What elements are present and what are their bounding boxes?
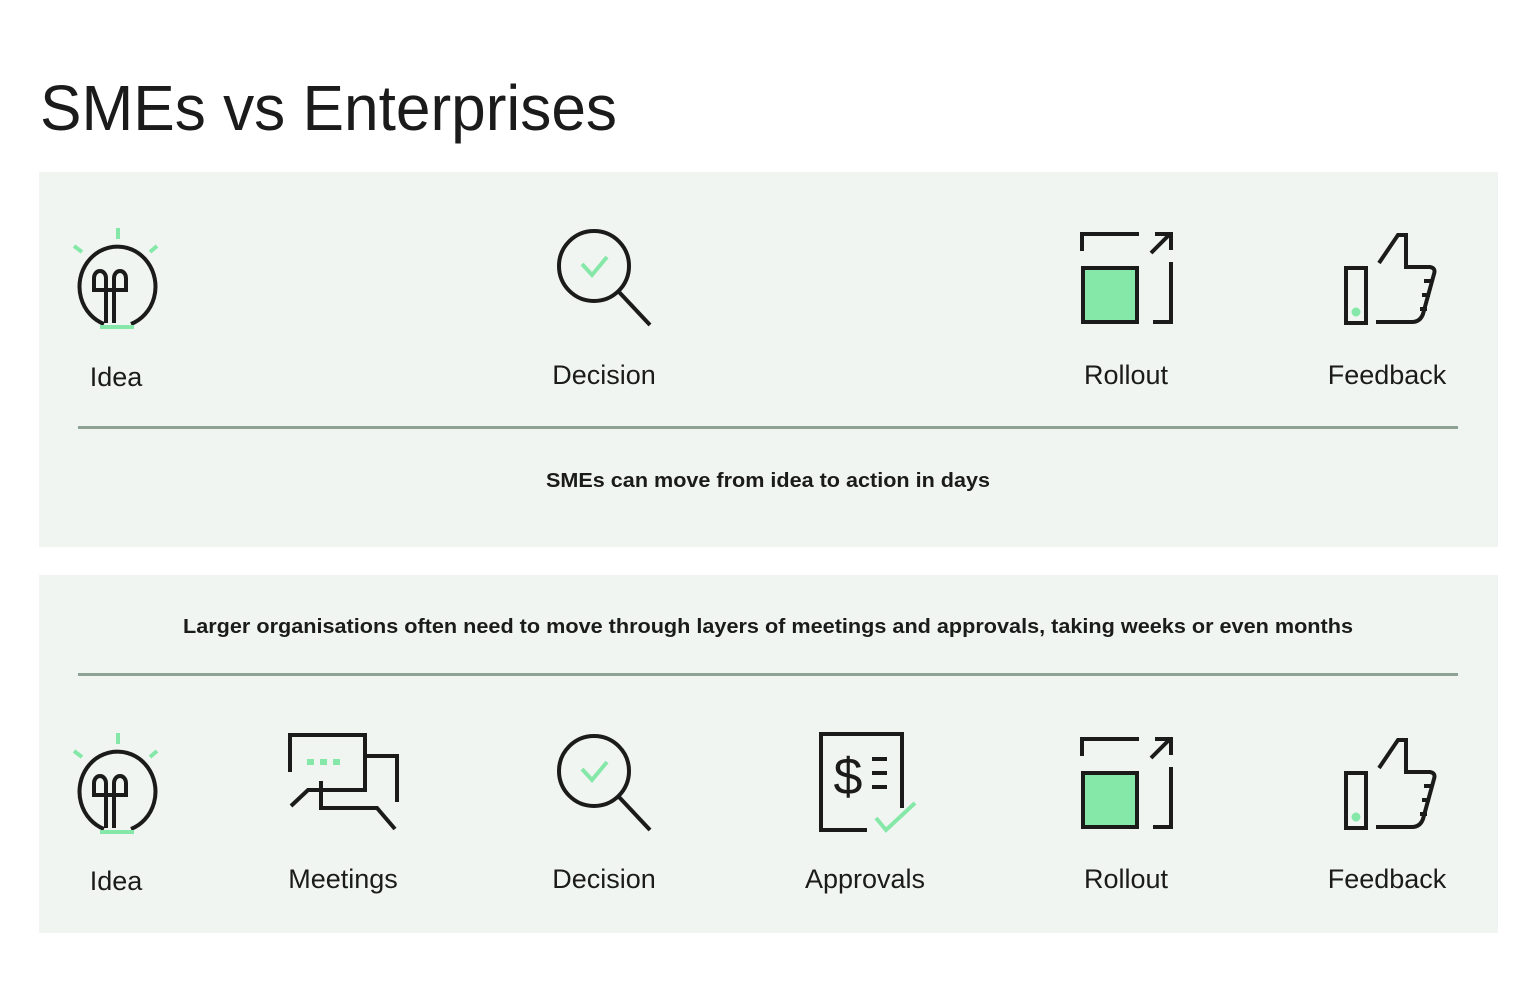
icon: decision [559, 736, 650, 830]
label: meetings: Meetings [288, 864, 398, 894]
icon: approvals: $ [834, 748, 863, 806]
label: idea: Idea [90, 866, 143, 896]
panel: SMEs [39, 172, 1498, 547]
label: approvals: Approvals [805, 864, 925, 894]
label: rollout: Rollout [1084, 360, 1169, 390]
icon: rollout [1082, 739, 1171, 827]
title: SMEs vs Enterprises [40, 72, 617, 144]
label: feedback: Feedback [1328, 360, 1447, 390]
icon: meetings [290, 735, 397, 829]
label: idea: Idea [90, 362, 143, 392]
label: rollout: Rollout [1084, 864, 1169, 894]
label: decision: Decision [552, 864, 656, 894]
caption: SMEs: SMEs can move from idea to action in days [546, 470, 990, 492]
icon: idea [74, 228, 157, 329]
icon: approvals [821, 734, 915, 830]
icon: idea [74, 733, 157, 834]
label: decision: Decision [552, 360, 656, 390]
panel: enterprises [39, 575, 1498, 933]
label: feedback: Feedback [1328, 864, 1447, 894]
icon: feedback [1346, 740, 1434, 828]
icon: decision [559, 231, 650, 325]
icon: feedback [1346, 235, 1434, 323]
icon: rollout [1082, 234, 1171, 322]
caption: enterprises: Larger organisations often need to move through layers of meetings and approvals, taking weeks or even months [183, 616, 1353, 638]
